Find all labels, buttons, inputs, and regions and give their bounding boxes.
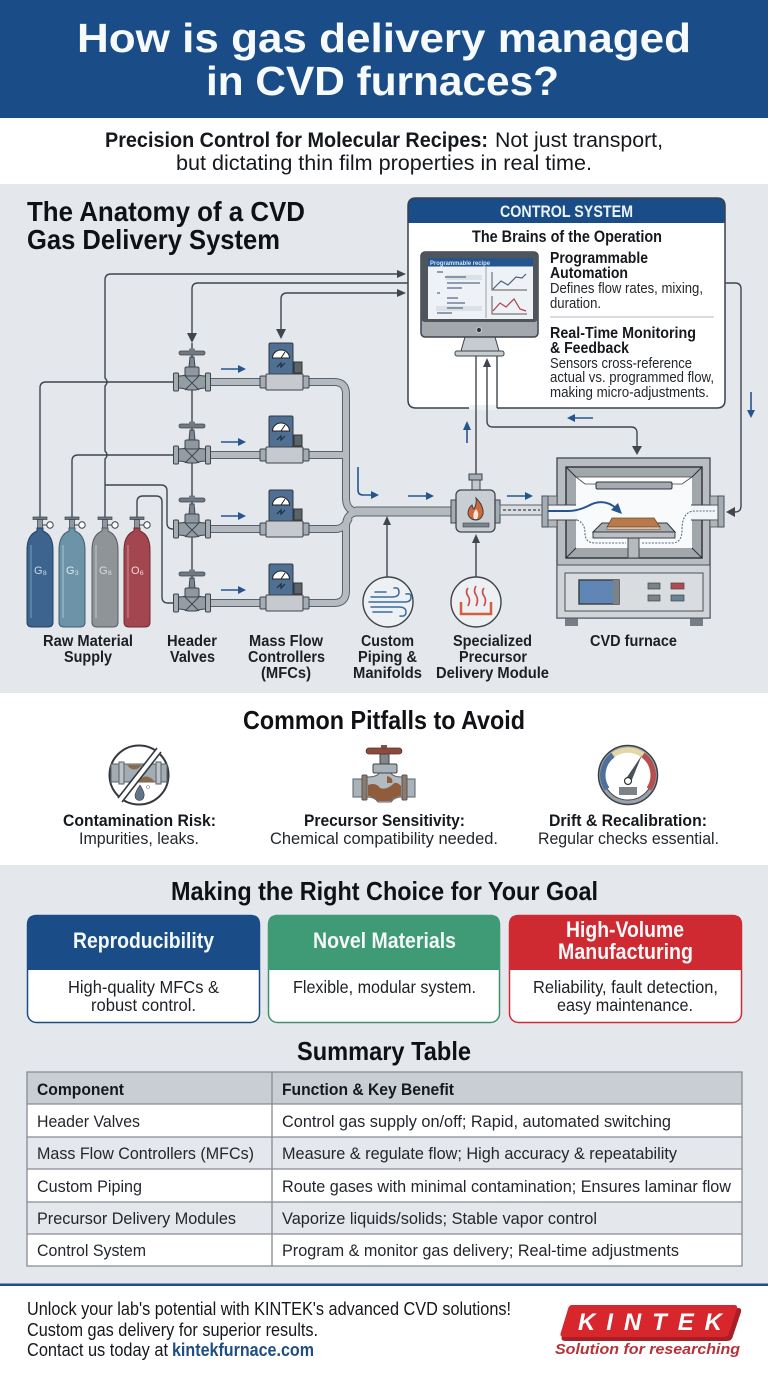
footer call to action: Custom gas delivery for superior results. xyxy=(27,1320,318,1340)
label: custom piping xyxy=(353,633,422,682)
label: precursor module: Precursor xyxy=(459,649,527,666)
text: programmable automation xyxy=(550,250,703,312)
row: custom piping xyxy=(37,1177,732,1196)
label: precursor module: Delivery Module xyxy=(436,665,549,682)
card: high-volume manufacturing: Manufacturing xyxy=(558,939,693,964)
row: precursor delivery modules: Precursor Delivery Modules xyxy=(37,1209,236,1228)
heading: summary table: Summary Table xyxy=(297,1036,471,1066)
card: novel materials xyxy=(268,915,500,1022)
icon: monitor xyxy=(421,252,538,356)
card: novel materials: Flexible, modular system. xyxy=(293,977,476,997)
summary table xyxy=(27,1072,742,1266)
icon: monitor: Programmable recipe xyxy=(430,261,491,267)
right flange xyxy=(710,496,724,527)
subtitle xyxy=(105,128,663,175)
row: header valves: Header Valves xyxy=(37,1112,140,1131)
sample stage xyxy=(593,518,675,538)
gas flow arrow xyxy=(548,502,617,511)
row: mass flow controllers xyxy=(37,1144,677,1163)
heading: right choice: Making the Right Choice for Your Goal xyxy=(171,876,598,906)
text: programmable automation: Automation xyxy=(550,265,628,282)
left flange xyxy=(542,496,557,527)
logo: KINTEK: Solution for researching xyxy=(555,1341,740,1358)
label: custom piping: Manifolds xyxy=(353,665,422,682)
text: contamination risk: Contamination Risk: xyxy=(63,811,216,830)
control panel xyxy=(557,565,710,618)
label: raw material supply xyxy=(43,633,133,666)
label: header valves: Header xyxy=(167,633,217,650)
label: raw material supply: Raw Material xyxy=(43,633,133,650)
subtitle: Precision Control for Molecular Recipes: xyxy=(105,128,488,152)
row: mass flow controllers: Mass Flow Controllers (MFCs) xyxy=(37,1144,254,1163)
cylinder 3: G₈ xyxy=(99,565,112,577)
label: mass flow controllers: Mass Flow xyxy=(249,633,324,650)
row: precursor delivery modules xyxy=(37,1209,597,1228)
text: contamination risk xyxy=(63,811,216,848)
card: high-volume manufacturing xyxy=(509,915,742,1022)
text: precursor sensitivity xyxy=(270,811,498,848)
title banner: in CVD furnaces? xyxy=(206,58,559,104)
heading: control system: CONTROL SYSTEM xyxy=(500,202,633,221)
table header: Function & Key Benefit xyxy=(282,1080,454,1099)
label: header valves: Valves xyxy=(170,649,215,666)
title banner xyxy=(0,0,768,118)
card: reproducibility xyxy=(27,915,260,1022)
footer call to action xyxy=(27,1299,511,1360)
row: header valves xyxy=(37,1112,671,1131)
label: precursor module: Specialized xyxy=(453,633,532,650)
mass flow controllers xyxy=(260,343,309,611)
heading: anatomy: Gas Delivery System xyxy=(27,224,280,255)
label: mass flow controllers xyxy=(248,633,325,682)
label: mass flow controllers: Controllers xyxy=(248,649,325,666)
row: precursor delivery modules: Vaporize liquids/solids; Stable vapor control xyxy=(282,1209,597,1228)
card: reproducibility: robust control. xyxy=(91,995,196,1015)
text: precursor sensitivity: Precursor Sensitivity: xyxy=(304,811,465,830)
cylinder 2: G₃ xyxy=(66,565,79,577)
card: high-volume manufacturing: easy maintenance. xyxy=(557,995,693,1015)
text: drift and recalibration: Drift & Recalibration: xyxy=(549,811,707,830)
subtitle: but dictating thin film properties in real time. xyxy=(176,151,592,175)
table header: Component xyxy=(37,1080,124,1099)
label: custom piping: Custom xyxy=(361,633,414,650)
logo: KINTEK xyxy=(555,1305,741,1358)
CVD furnace xyxy=(542,458,724,626)
label: cvd furnace: CVD furnace xyxy=(590,633,677,650)
card: novel materials: Novel Materials xyxy=(313,928,456,953)
card: high-volume manufacturing: Reliability, fault detection, xyxy=(533,977,718,997)
table header xyxy=(37,1080,454,1099)
cylinder 4: O₆ xyxy=(131,565,144,577)
right port xyxy=(691,505,718,520)
icon: contamination xyxy=(110,746,168,804)
card: reproducibility: Reproducibility xyxy=(73,928,215,953)
panel: control system xyxy=(408,198,725,410)
text: programmable automation: Programmable xyxy=(550,250,648,267)
icon: precursor heater xyxy=(451,534,501,627)
heading: pitfalls: Common Pitfalls to Avoid xyxy=(243,705,525,735)
row: custom piping: Custom Piping xyxy=(37,1177,142,1196)
footer rule xyxy=(0,1284,768,1286)
title banner: How is gas delivery managed xyxy=(77,15,691,61)
row: control system: Control System xyxy=(37,1241,146,1260)
gas cylinders xyxy=(27,517,150,627)
card: reproducibility: High-quality MFCs & xyxy=(68,977,219,997)
precursor delivery module xyxy=(451,474,500,532)
text: programmable automation: Defines flow rates, mixing, xyxy=(550,280,703,297)
subheading: brains: The Brains of the Operation xyxy=(472,227,662,246)
text: precursor sensitivity: Chemical compatibility needed. xyxy=(270,829,498,848)
gas supply lines xyxy=(40,382,174,603)
text: drift and recalibration: Regular checks essential. xyxy=(538,829,719,848)
text: contamination risk: Impurities, leaks. xyxy=(79,829,199,848)
row: control system xyxy=(37,1241,679,1260)
outlet pipe xyxy=(500,505,543,515)
text: drift and recalibration xyxy=(538,811,719,848)
subtitle: Not just transport, xyxy=(495,128,663,152)
left port xyxy=(548,505,577,520)
icon: custom piping xyxy=(363,516,413,627)
furnace chamber xyxy=(548,467,718,558)
icon: gauge xyxy=(598,746,658,804)
flow arrows xyxy=(221,365,755,594)
diagram labels xyxy=(43,633,677,682)
text: real-time monitoring: Real-Time Monitoring xyxy=(550,325,696,342)
text: real-time monitoring xyxy=(550,325,714,401)
cylinder 1: G₈ xyxy=(34,565,47,577)
card: high-volume manufacturing: High-Volume xyxy=(566,917,684,942)
icon: corroded valve xyxy=(353,745,415,802)
text: programmable automation: duration. xyxy=(550,295,601,312)
label: raw material supply: Supply xyxy=(64,649,112,666)
footer call to action: Unlock your lab's potential with KINTEK's advanced CVD solutions! xyxy=(27,1299,511,1319)
heading: anatomy xyxy=(27,196,305,255)
control signal lines xyxy=(105,270,741,603)
row: header valves: Control gas supply on/off; Rapid, automated switching xyxy=(282,1112,671,1131)
row: mass flow controllers: Measure & regulate flow; High accuracy & repeatability xyxy=(282,1144,677,1163)
label: precursor module xyxy=(436,633,549,682)
logo: KINTEK: KINTEK xyxy=(578,1309,724,1336)
footer call to action: kintekfurnace.com xyxy=(172,1340,314,1360)
text: real-time monitoring: & Feedback xyxy=(550,340,629,357)
text: real-time monitoring: making micro-adjustments. xyxy=(550,384,709,401)
footer call to action: Contact us today at xyxy=(27,1340,168,1360)
custom piping and manifold xyxy=(211,382,452,603)
label: custom piping: Piping & xyxy=(358,649,417,666)
panel: common pitfalls xyxy=(63,705,719,848)
text: real-time monitoring: Sensors cross-reference xyxy=(550,355,692,372)
label: header valves xyxy=(167,633,217,666)
row: custom piping: Route gases with minimal contamination; Ensures laminar flow xyxy=(282,1177,732,1196)
header valves xyxy=(174,348,210,612)
label: mass flow controllers: (MFCs) xyxy=(261,665,311,682)
text: real-time monitoring: actual vs. programmed flow, xyxy=(550,369,714,386)
row: control system: Program & monitor gas delivery; Real-time adjustments xyxy=(282,1241,679,1260)
heading: anatomy: The Anatomy of a CVD xyxy=(27,196,305,227)
